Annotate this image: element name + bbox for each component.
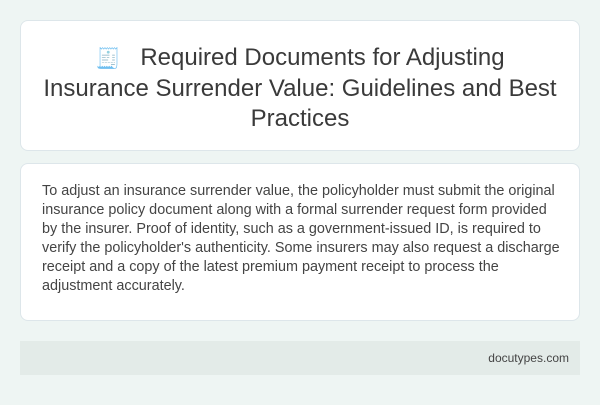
panel: body [20, 163, 580, 321]
footer [20, 341, 580, 375]
title: 🧾 Required Documents for Adjusting Insurance Surrender Value: Guidelines and Best Practices [43, 44, 557, 132]
text block: To adjust an insurance surrender value, the policyholder must submit the original insurance policy document along with a formal surrender request form provided by the insurer. Proof of identity, such as a government-issued ID, is required to verify the policyholder's authenticity. Some insurers may also request a discharge receipt and a copy of the latest premium payment receipt to process the adjustment accurately. [42, 183, 560, 294]
panel: title [20, 20, 580, 151]
footer: docutypes.com [488, 351, 569, 365]
